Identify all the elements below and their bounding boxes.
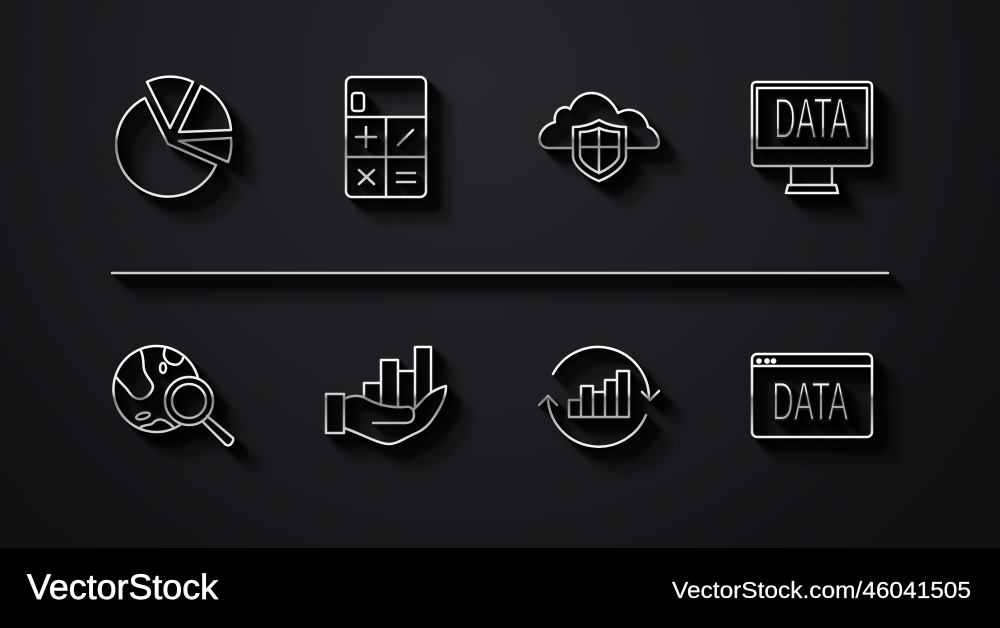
icon: browser window with DATA	[752, 354, 872, 437]
watermark bar	[0, 548, 1000, 628]
icon: pie chart	[116, 77, 231, 197]
icon: monitor with DATA	[752, 82, 872, 193]
icon: hand with bar chart	[326, 347, 446, 444]
divider	[112, 272, 888, 274]
icon: calculator	[346, 77, 426, 197]
watermark url: VectorStock.com/46041505	[672, 577, 971, 603]
watermark brand: VectorStock	[27, 568, 219, 607]
DATA label: DATA	[772, 372, 848, 432]
icon: cloud with shield	[540, 93, 659, 181]
icon: globe with magnifier	[113, 346, 233, 445]
icon: refresh cycle with bar chart	[539, 347, 659, 447]
DATA label: DATA	[774, 87, 850, 151]
